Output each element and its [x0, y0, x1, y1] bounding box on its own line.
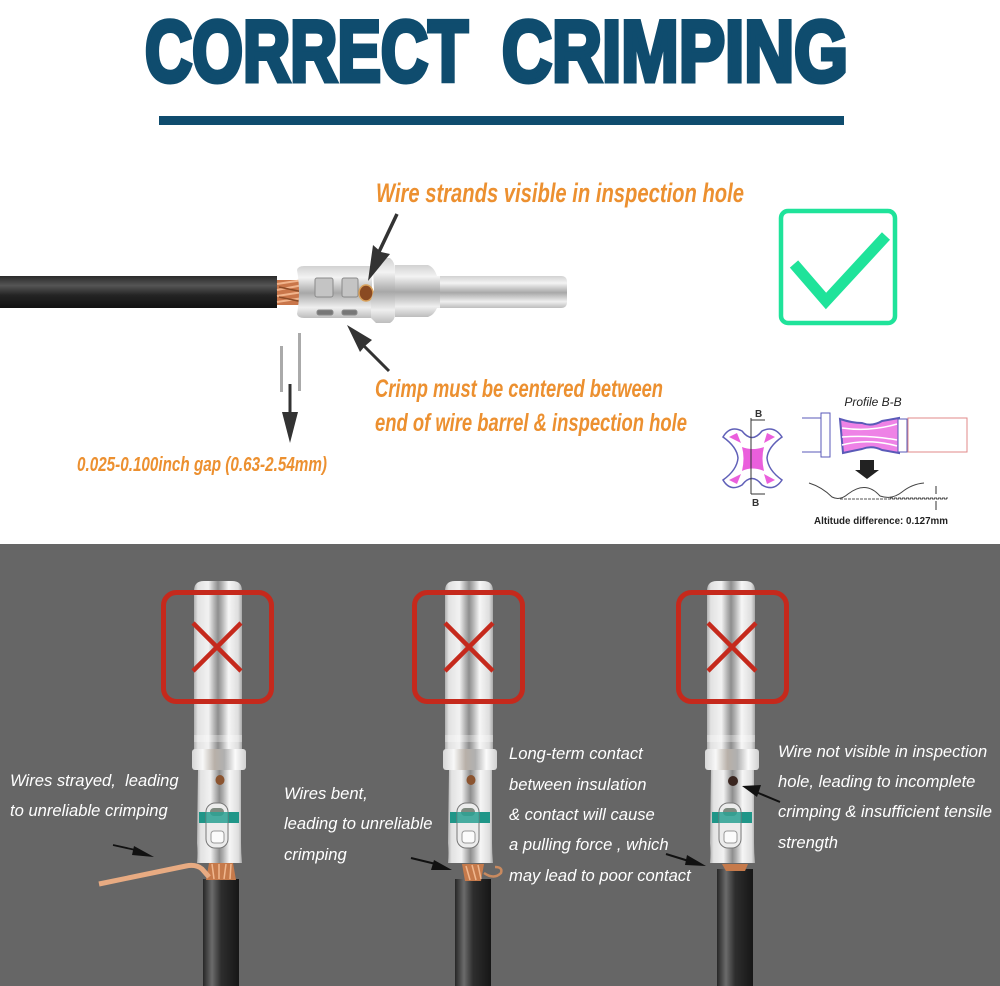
- red X box: [164, 592, 272, 702]
- caption: hole, leading to incomplete: [778, 772, 975, 791]
- caption: Wires bent,: [284, 784, 368, 803]
- crimped barrel: [297, 266, 372, 318]
- caption: crimping & insufficient tensile: [778, 802, 992, 821]
- black cable: [0, 276, 277, 308]
- diagram: cross section: [723, 409, 782, 509]
- caption: to unreliable crimping: [10, 801, 168, 820]
- arrow: [411, 858, 452, 870]
- diagram: cross section: B: [752, 498, 759, 509]
- caption long-term: Long-term contact: [509, 744, 644, 763]
- diagram: profile B-B: Altitude difference: 0.127mm: [814, 516, 948, 527]
- arrow: [113, 845, 154, 857]
- caption long-term: [509, 744, 692, 885]
- caption: strength: [778, 833, 838, 852]
- caption long-term: & contact will cause: [509, 805, 655, 824]
- title: [145, 4, 848, 100]
- arrow: to crimp: [347, 325, 389, 371]
- wrong crimp 3: [666, 581, 992, 986]
- caption: crimping: [284, 845, 347, 864]
- strayed wire: [99, 865, 209, 884]
- orange label: crimp centered: Crimp must be centered between: [375, 375, 663, 403]
- diagram: profile B-B: [802, 395, 967, 527]
- diagram: cross section: B: [755, 409, 762, 420]
- caption: [10, 771, 179, 820]
- caption: Wire not visible in inspection: [778, 742, 987, 761]
- red X box: [414, 592, 522, 702]
- inspection hole: [216, 775, 224, 785]
- red X box: [678, 592, 786, 702]
- caption: leading to unreliable: [284, 814, 433, 833]
- orange label: inspection hole: Wire strands visible in inspection hole: [376, 178, 744, 208]
- copper strands: [277, 280, 303, 305]
- caption long-term: may lead to poor contact: [509, 866, 692, 885]
- title: CORRECT: [145, 4, 468, 100]
- gap lines and arrow: [280, 333, 301, 443]
- pin: [440, 276, 567, 308]
- orange label: crimp centered: [375, 375, 687, 437]
- inspection hole with strands: [359, 285, 373, 301]
- caption: [284, 784, 433, 864]
- diagram: profile B-B: Profile B-B: [844, 395, 902, 409]
- bent wire loop: [484, 867, 501, 876]
- wrong crimp 1: [10, 581, 272, 986]
- arrow: hole: [742, 785, 780, 802]
- title: CRIMPING: [502, 4, 848, 100]
- crimp indents: [315, 278, 358, 315]
- collar: [371, 258, 395, 323]
- orange label: crimp centered: end of wire barrel & inspection hole: [375, 409, 687, 437]
- caption: [778, 742, 992, 852]
- icon: green check: [781, 211, 895, 323]
- terminal: [192, 581, 246, 863]
- title underline: [159, 116, 844, 125]
- dark panel: [0, 544, 1000, 986]
- caption: Wires strayed, leading: [10, 771, 179, 790]
- arrow: to inspection hole: [368, 214, 397, 281]
- caption long-term: a pulling force , which: [509, 835, 669, 854]
- shoulder and taper: [395, 265, 442, 317]
- caption long-term: between insulation: [509, 775, 646, 794]
- cable: [203, 879, 239, 986]
- connector photo: correct crimp: [0, 258, 567, 323]
- arrow: bottom: [666, 854, 706, 866]
- wrong crimp 2: [284, 581, 692, 986]
- orange label: gap: 0.025-0.100inch gap (0.63-2.54mm): [77, 454, 327, 476]
- strands: [206, 863, 236, 880]
